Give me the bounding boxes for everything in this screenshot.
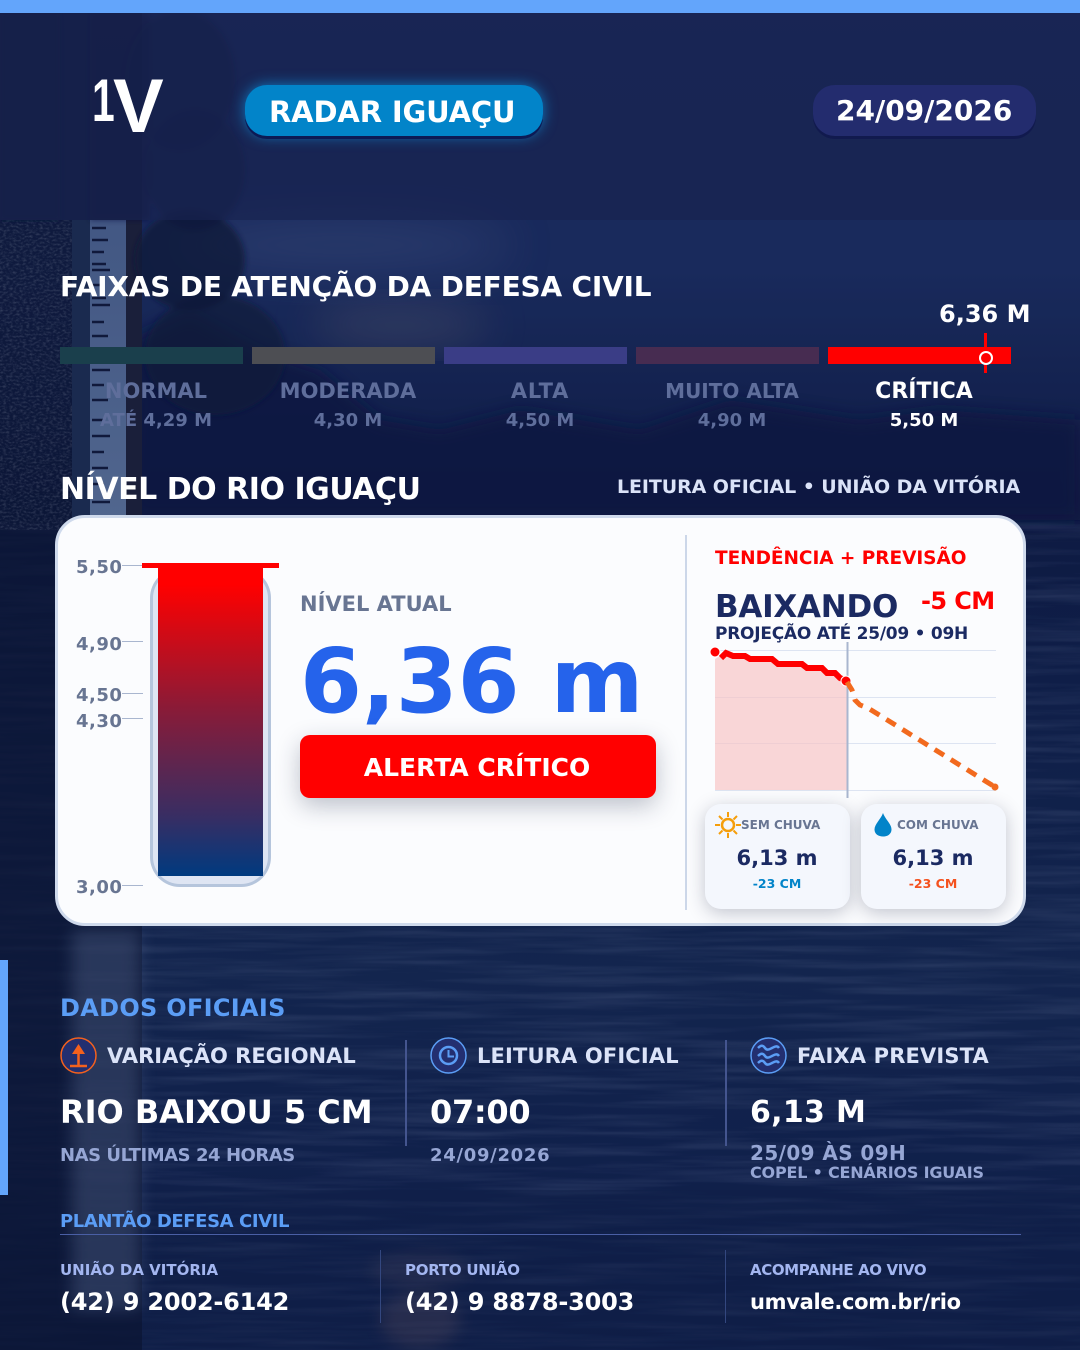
left accent bar <box>0 960 8 1195</box>
scale label: critica: CRÍTICA <box>875 379 973 404</box>
header band overlay <box>0 13 1080 220</box>
heading: plantao: PLANTÃO DEFESA CIVIL <box>60 1211 289 1232</box>
tree foliage <box>0 10 285 415</box>
delta: -23 CM <box>909 876 957 891</box>
scale label: muito alta: 4,90 M <box>698 410 766 431</box>
label: faixa prevista: FAIXA PREVISTA <box>797 1044 989 1068</box>
alert button <box>300 735 656 798</box>
bar: normal <box>60 347 243 364</box>
label: leitura oficial: LEITURA OFICIAL <box>477 1044 679 1068</box>
thermometer cap <box>142 563 279 568</box>
thermometer: 3,00 <box>76 877 122 898</box>
value: 6,13 m <box>736 846 818 870</box>
contact: acompanhe ao vivo <box>750 1261 961 1314</box>
note: forecast date: 25/09 ÀS 09H <box>750 1141 906 1165</box>
label: nivel atual: NÍVEL ATUAL <box>300 592 452 616</box>
trend word: BAIXANDO <box>715 589 898 625</box>
divider <box>725 1250 726 1323</box>
thermometer <box>76 557 279 898</box>
scale label: alta <box>506 379 574 431</box>
badge: Radar Iguaçu <box>245 85 543 136</box>
card: com chuva <box>861 804 1006 909</box>
divider <box>685 535 687 910</box>
contact: uniao da vitoria <box>60 1260 289 1316</box>
scale label: muito alta: MUITO ALTA <box>665 379 799 403</box>
thermometer: 4,50 <box>76 685 122 706</box>
label: variacao regional: VARIAÇÃO REGIONAL <box>107 1044 356 1068</box>
marker dot <box>979 351 993 365</box>
rule <box>60 1234 1021 1235</box>
current level marker <box>984 333 987 373</box>
icon: drop <box>874 813 892 836</box>
divider <box>380 1250 381 1323</box>
scale label: moderada: MODERADA <box>280 379 416 403</box>
tick labels: 5,50 <box>76 557 122 578</box>
note: copel: COPEL • CENÁRIOS IGUAIS <box>750 1163 984 1182</box>
scale label: critica <box>875 377 973 431</box>
value: 6,13 m <box>892 846 974 870</box>
date text: 24/09/2026 <box>836 94 1012 127</box>
badge: date <box>813 85 1036 136</box>
bar: alta <box>444 347 627 364</box>
label: COM CHUVA <box>897 818 978 832</box>
label: tendencia: TENDÊNCIA + PREVISÃO <box>715 548 966 569</box>
panel: level card <box>55 515 1026 926</box>
alert text: ALERTA CRÍTICO <box>364 753 590 782</box>
scale label: normal: NORMAL <box>105 379 207 403</box>
icon: sun <box>715 812 741 838</box>
logo: 1V: 1 <box>92 67 115 134</box>
thermometer tube <box>150 568 271 887</box>
scale label: alta: 4,50 M <box>506 410 574 431</box>
tick lines <box>122 565 142 566</box>
value: 6,13 M: 6,13 M <box>750 1095 866 1130</box>
bar: moderada <box>252 347 435 364</box>
value: rio baixou: RIO BAIXOU 5 CM <box>60 1093 373 1131</box>
icon: arrow up <box>60 1037 97 1074</box>
scale label: muito alta <box>665 379 799 431</box>
bar: muito alta <box>636 347 819 364</box>
icon: waves <box>750 1037 787 1074</box>
contact: acompanhe ao vivo: umvale.com.br/rio <box>750 1290 961 1314</box>
thermometer: 4,30 <box>76 711 122 732</box>
divider <box>405 1040 407 1146</box>
icon: clock <box>430 1037 467 1074</box>
trend value: -5 CM <box>921 587 995 615</box>
contact: porto uniao <box>405 1260 634 1316</box>
contact: uniao da vitoria: (42) 9 2002-6142 <box>60 1288 289 1316</box>
scale label: moderada: 4,30 M <box>314 410 382 431</box>
contact: porto uniao: PORTO UNIÃO <box>405 1261 520 1279</box>
current level value: 6,36 M <box>939 300 1030 328</box>
scale label: alta: ALTA <box>511 379 569 403</box>
divider <box>725 1040 727 1146</box>
contact: acompanhe ao vivo: ACOMPANHE AO VIVO <box>750 1261 926 1279</box>
scale label: moderada <box>280 379 416 431</box>
thermometer fill <box>158 566 263 876</box>
heading: faixas: FAIXAS DE ATENÇÃO DA DEFESA CIVIL <box>60 270 651 303</box>
thermometer: 4,90 <box>76 634 122 655</box>
heading: dados oficiais: DADOS OFICIAIS <box>60 994 286 1022</box>
label: SEM CHUVA <box>741 818 820 832</box>
alert scale bars <box>60 333 1011 373</box>
bar: critica <box>828 347 1011 364</box>
top accent bar <box>0 0 1080 13</box>
value: hour: 07:00 <box>430 1093 530 1131</box>
subheading: leitura oficial: LEITURA OFICIAL • UNIÃO DA VITÓRIA <box>617 476 1020 498</box>
heading: nivel do rio: NÍVEL DO RIO IGUAÇU <box>60 472 420 507</box>
projection label: PROJEÇÃO ATÉ 25/09 • 09H <box>715 624 968 644</box>
contact: uniao da vitoria: UNIÃO DA VITÓRIA <box>60 1261 218 1279</box>
big value: 6,36 m <box>300 629 643 733</box>
badge text: RADAR IGUAÇU <box>269 95 515 129</box>
logo: 1V: V <box>113 64 164 149</box>
note: date: 24/09/2026 <box>430 1145 550 1166</box>
scale label: critica: 5,50 M <box>890 410 958 431</box>
delta: -23 CM <box>753 876 801 891</box>
scale label: normal: ATÉ 4,29 M <box>100 410 212 431</box>
ruler gauge <box>90 220 142 520</box>
contact: porto uniao: (42) 9 8878-3003 <box>405 1288 634 1316</box>
scale label: normal <box>100 379 212 431</box>
note: ultimas 24 horas: NAS ÚLTIMAS 24 HORAS <box>60 1145 295 1166</box>
card: sem chuva <box>705 804 850 909</box>
